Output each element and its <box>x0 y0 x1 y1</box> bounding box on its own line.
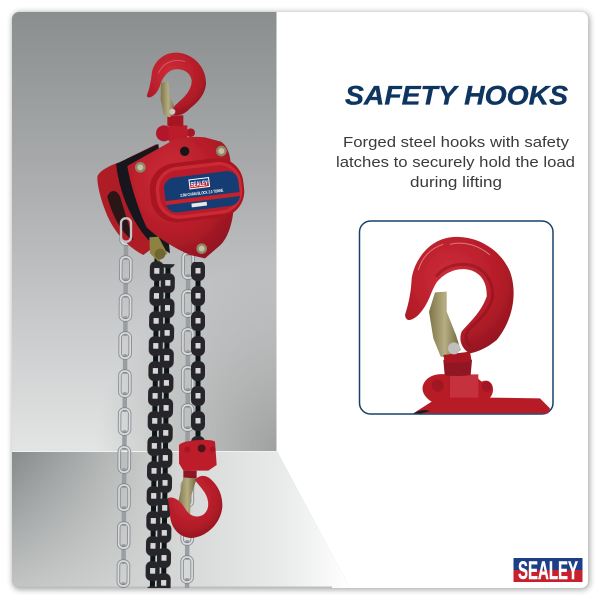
bolts <box>135 146 227 254</box>
yoke <box>413 357 550 413</box>
floor <box>12 451 350 588</box>
latch pin <box>448 342 460 354</box>
hook block <box>179 440 217 478</box>
data plate: SEALEY <box>190 178 209 189</box>
side opening <box>107 191 133 240</box>
front housing plate <box>127 137 233 258</box>
chain guide <box>149 237 167 262</box>
top hook <box>147 53 206 115</box>
hook latch <box>178 477 197 518</box>
black centre plate <box>116 144 170 253</box>
hook highlights <box>418 243 490 270</box>
illustration: chain block hoist with top hook <box>97 53 247 262</box>
panel: hook close-up inset <box>360 221 553 414</box>
illustration: close-up hook <box>405 237 550 413</box>
latch pin <box>169 109 175 115</box>
heading: SAFETY HOOKS <box>345 80 568 110</box>
data plate: 2.0M CHAIN BLOCK 2.0 TONNE <box>180 188 224 198</box>
description text: Forged steel hooks with safety <box>343 134 570 151</box>
rear housing plate <box>97 144 163 255</box>
description text <box>336 134 575 191</box>
chain: black load chain right <box>189 262 207 447</box>
data plate <box>163 170 241 214</box>
neck <box>443 352 472 363</box>
panel: text and detail column <box>336 80 575 191</box>
description text: latches to securely hold the load <box>336 154 575 171</box>
chain: galvanised hand chain left <box>116 216 133 588</box>
chain: black load chain middle <box>155 264 177 588</box>
description text: during lifting <box>410 174 502 191</box>
silver chain loop at housing <box>121 218 131 242</box>
swivel yoke <box>156 115 195 142</box>
latch <box>429 292 461 358</box>
hook <box>405 237 514 353</box>
latch <box>161 81 176 117</box>
raised gear cover <box>147 155 247 225</box>
chain: black load chain front <box>143 258 166 588</box>
hook inner shadow edge <box>436 264 493 347</box>
chain: galvanised hand chain right <box>180 250 195 588</box>
illustration: lower load hook <box>168 440 222 538</box>
hook body <box>168 476 222 538</box>
panel: product photo with grey studio backdrop <box>12 12 350 588</box>
back wall <box>12 12 276 452</box>
